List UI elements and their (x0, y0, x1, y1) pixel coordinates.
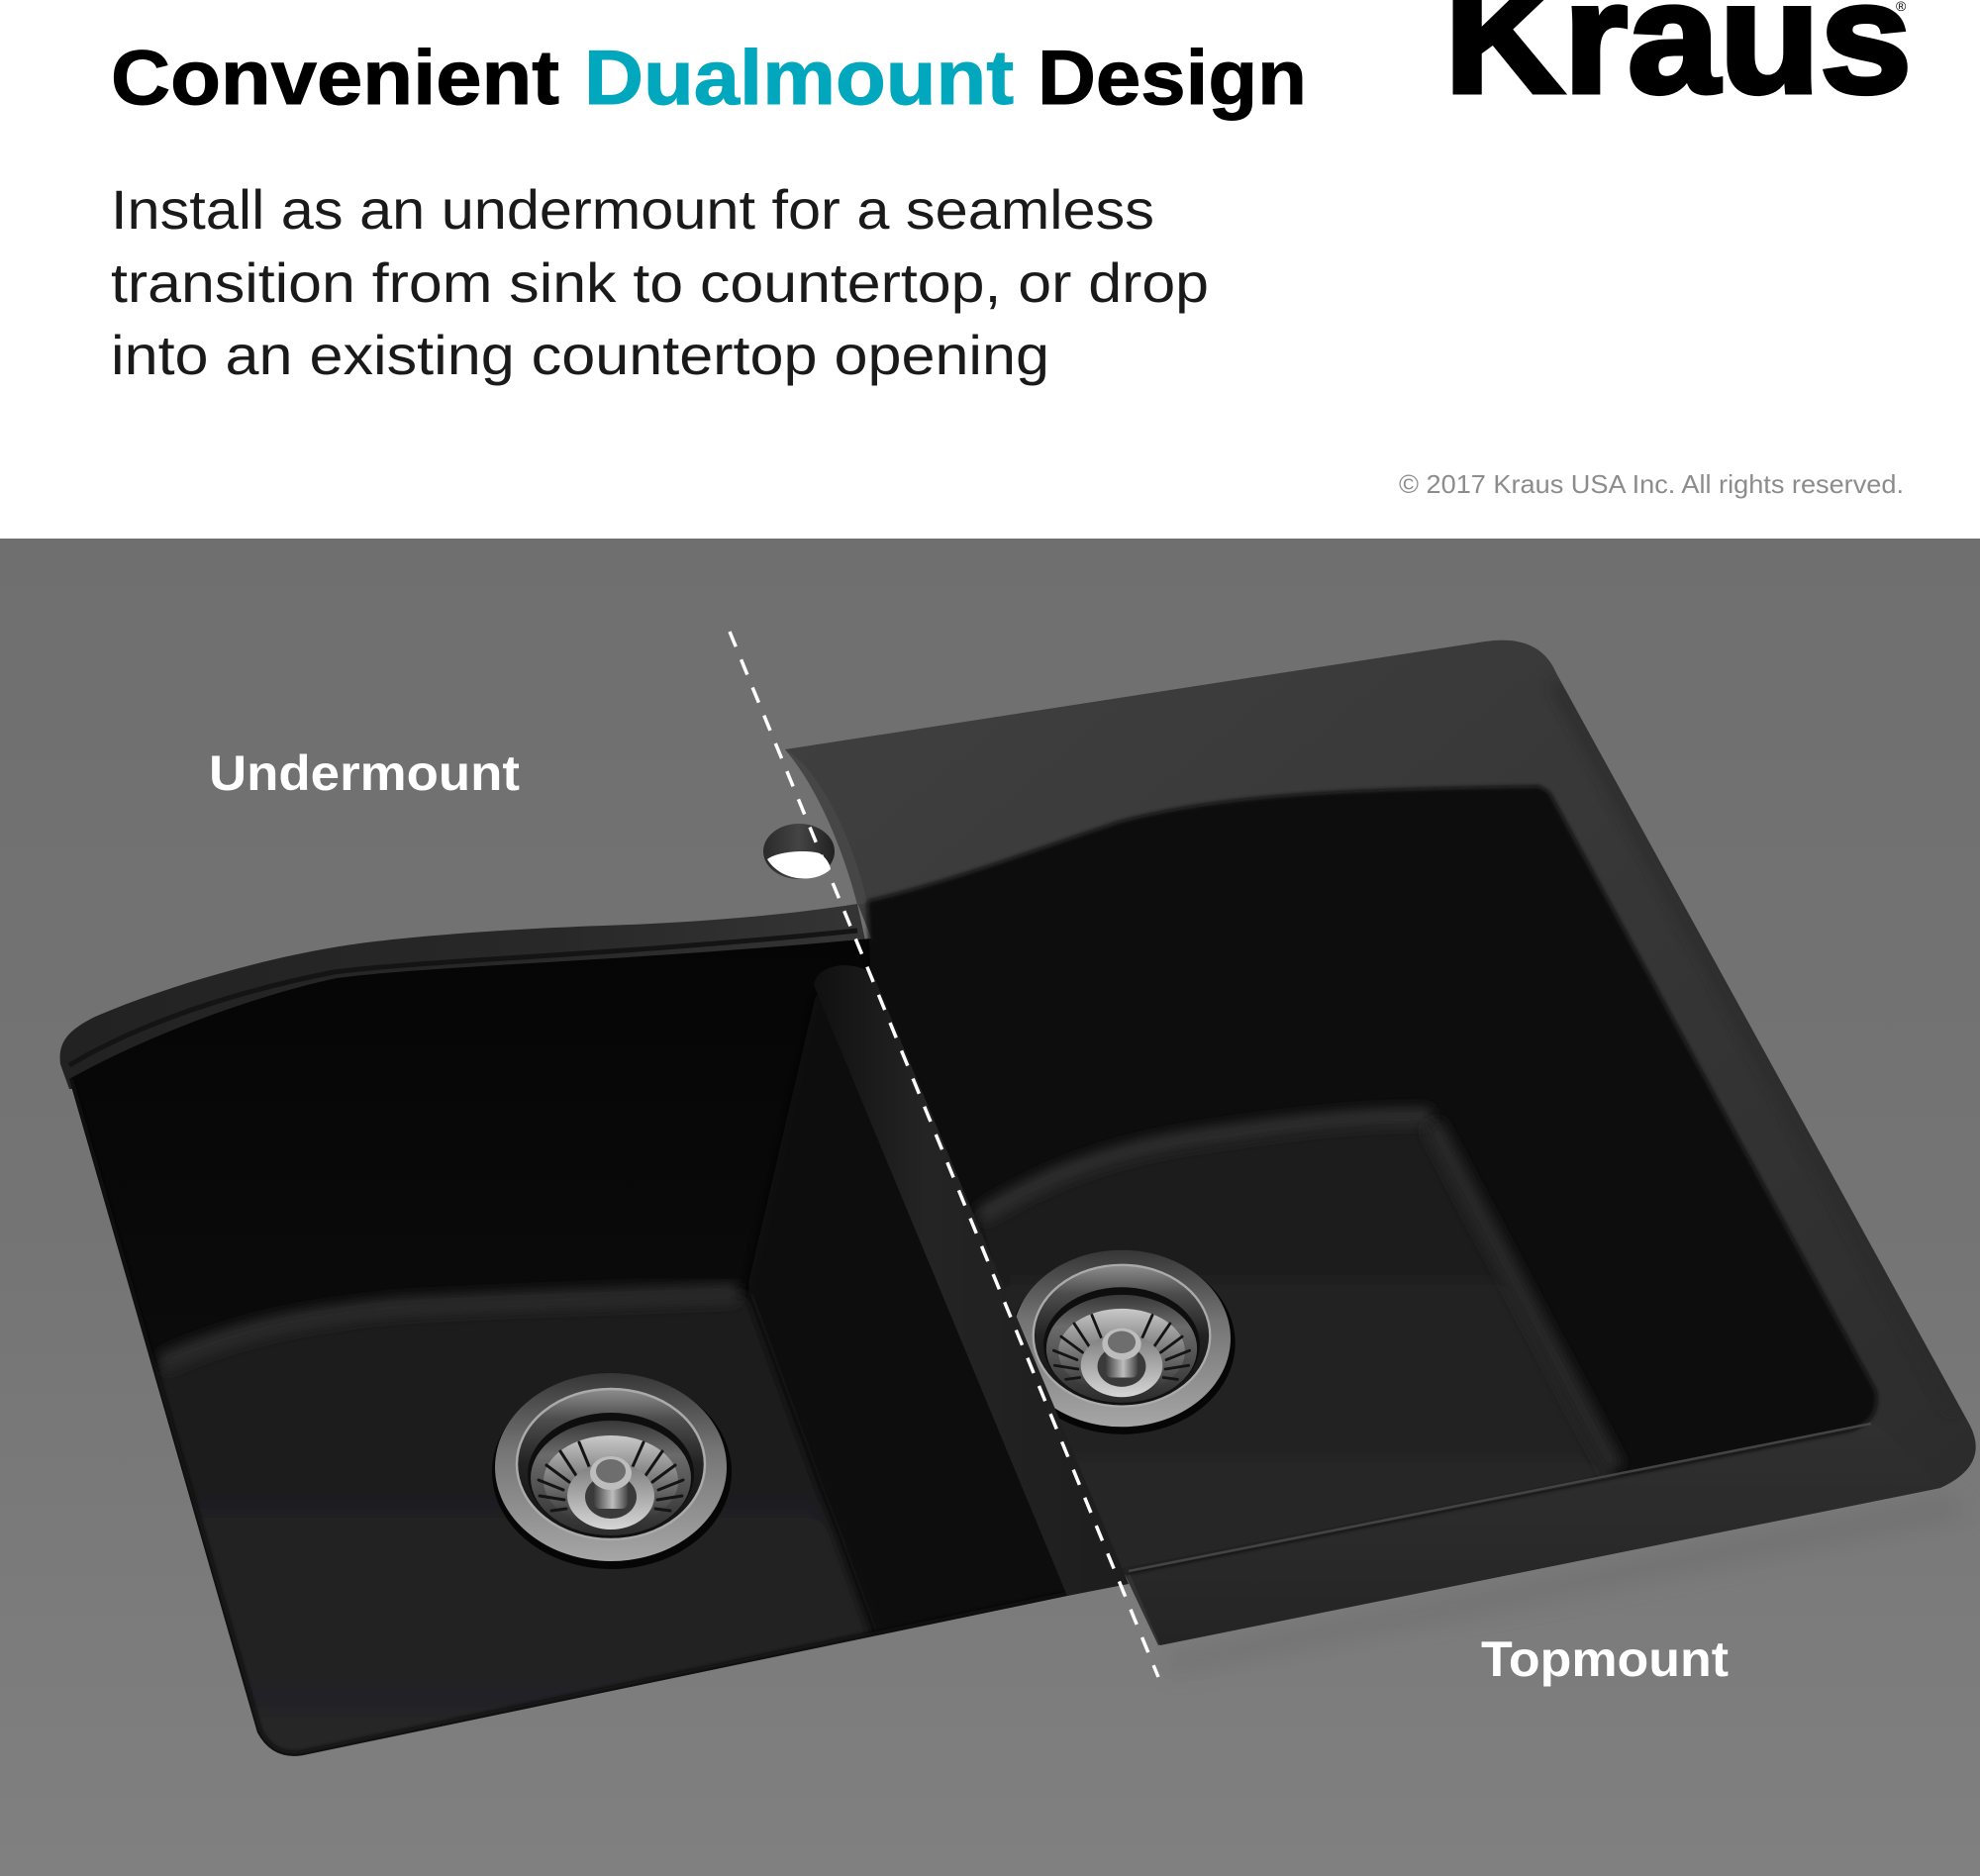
flange lower band (1129, 1424, 1940, 1645)
label: Topmount: Topmount (1481, 1631, 1729, 1687)
left basin side wall (883, 1596, 1067, 1634)
floor ridges (980, 1117, 1432, 1216)
title: Dualmount (584, 34, 1014, 121)
flange (785, 641, 1976, 1645)
topmount right basin (785, 641, 1976, 1645)
drain: left (492, 1373, 732, 1569)
left rim (60, 904, 876, 1089)
sink illustration (60, 641, 1976, 1772)
left basin interior (69, 938, 1124, 1756)
description text (111, 178, 1209, 386)
copyright note: © 2017 Kraus USA Inc. All rights reserved. (1399, 469, 1904, 499)
left basin floor (148, 1294, 873, 1772)
rim edge line (69, 931, 857, 1065)
description text: Install as an undermount for a seamless (111, 178, 1154, 241)
label: Undermount: Undermount (209, 745, 520, 801)
title (111, 34, 1307, 121)
flange outer bevel (1556, 683, 1955, 1411)
centre divider (814, 965, 1129, 1596)
basin lower lip highlight (1129, 1424, 1871, 1571)
countertop panel (0, 539, 1980, 1876)
description text: transition from sink to countertop, or drop (111, 251, 1209, 314)
faucet hole (763, 824, 835, 879)
dark floor edge (69, 1079, 1124, 1756)
floor ridge (160, 1293, 738, 1364)
cast shadow of topmount flange (1168, 1497, 1970, 1673)
title: Design (1038, 34, 1307, 121)
flange side edge (785, 749, 867, 905)
undermount left basin (60, 904, 1124, 1772)
dashed dividing line (730, 632, 1158, 1677)
drain: right (1010, 1250, 1236, 1434)
description text: into an existing countertop opening (111, 324, 1049, 386)
right basin interior (867, 786, 1877, 1574)
right basin floor (975, 1119, 1614, 1584)
title: Convenient (111, 34, 559, 121)
